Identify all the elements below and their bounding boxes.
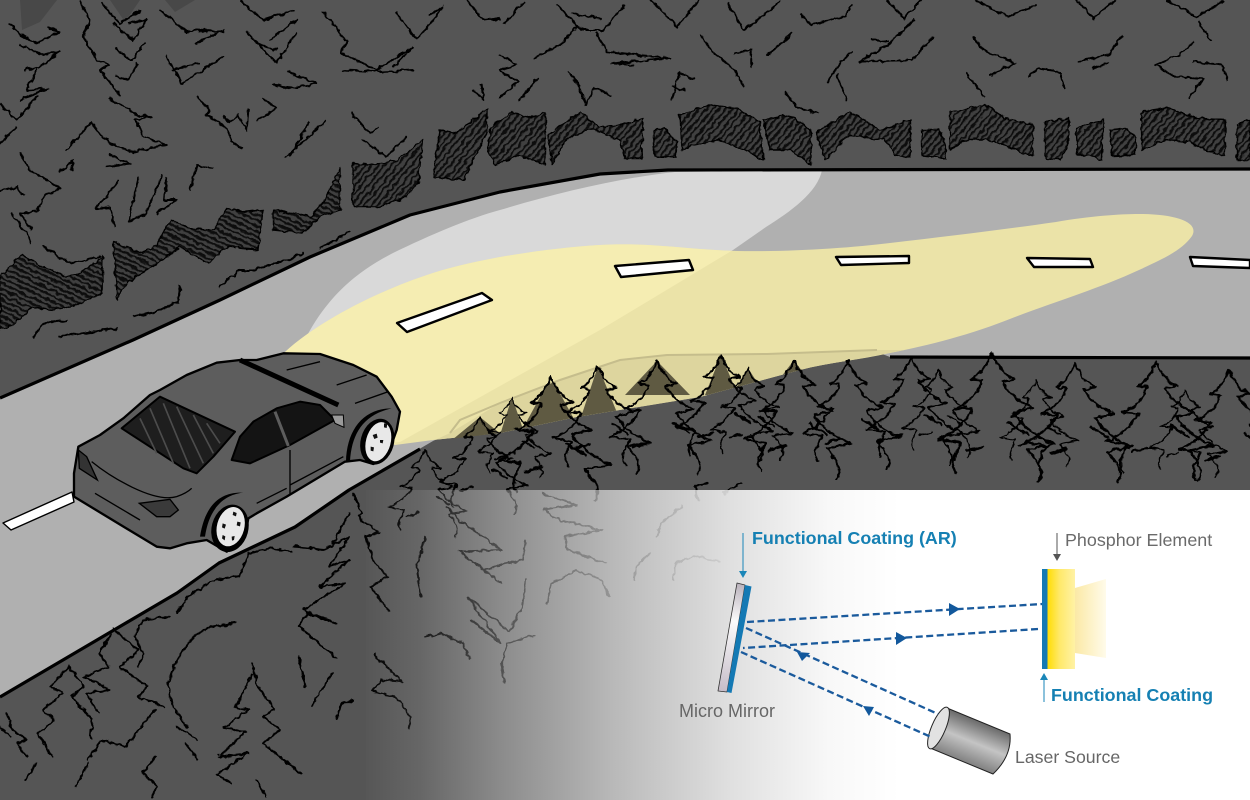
label: functional coating: Functional Coating bbox=[1051, 685, 1213, 705]
roof strip bbox=[240, 360, 338, 405]
window pillar bbox=[275, 412, 288, 446]
arrow: functional coating bbox=[1040, 673, 1048, 702]
label: micro mirror: Micro Mirror bbox=[679, 701, 775, 721]
side window bbox=[232, 402, 335, 463]
label: functional coating AR: Functional Coating (AR) bbox=[752, 528, 957, 548]
lit roadside bbox=[433, 350, 905, 441]
roadside edge in light bbox=[450, 350, 877, 433]
diagram bbox=[679, 528, 1213, 774]
upper forest tree sketch strokes, left bbox=[0, 0, 500, 337]
label: phosphor element: Phosphor Element bbox=[1065, 530, 1212, 550]
rear window bbox=[122, 397, 235, 473]
near roadside trees bbox=[389, 353, 1250, 536]
arrow: phosphor element bbox=[1053, 533, 1061, 561]
upper forest shading bbox=[20, 0, 195, 30]
arrow: AR coating bbox=[739, 533, 747, 578]
body lines bbox=[92, 362, 388, 520]
upper forest tree sketch strokes, right bbox=[500, 0, 1227, 113]
side mirror bbox=[332, 415, 344, 427]
lit tree silhouettes bbox=[452, 355, 812, 440]
tail light right bbox=[139, 499, 178, 517]
lower-left forest sketch strokes bbox=[0, 483, 741, 797]
micro mirror bbox=[718, 583, 752, 693]
label: laser source: Laser Source bbox=[1015, 747, 1120, 767]
rear wheel bbox=[200, 493, 254, 556]
car body bbox=[74, 353, 400, 552]
road edge lines bbox=[0, 169, 1250, 697]
light path arrowheads bbox=[797, 603, 960, 716]
high-beam light pool bbox=[285, 214, 1194, 445]
brighter beam overlap bbox=[285, 244, 732, 442]
low-beam wash: light grey spread on road bbox=[300, 170, 822, 442]
car bbox=[74, 353, 400, 556]
lane markings bbox=[3, 256, 1250, 530]
dark hatched tree shadows along far road edge bbox=[0, 105, 1250, 330]
tail light left bbox=[78, 450, 97, 480]
phosphor element bbox=[1042, 569, 1106, 669]
light paths bbox=[741, 604, 1042, 737]
fade panel behind the diagram bbox=[366, 490, 1250, 800]
laser source bbox=[923, 705, 1010, 774]
window hatching bbox=[140, 403, 220, 468]
front wheel bbox=[346, 408, 399, 469]
road surface bbox=[0, 169, 1250, 697]
